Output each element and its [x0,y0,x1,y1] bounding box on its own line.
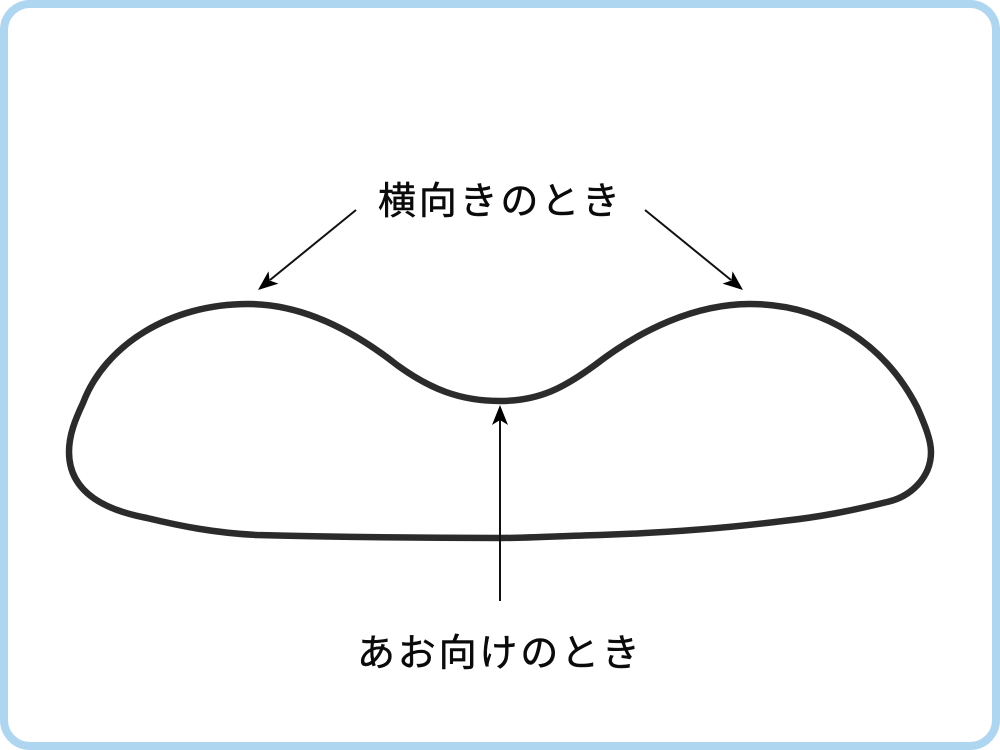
arrow: to right bump [645,210,743,290]
arrow: to left bump [258,210,356,290]
label: back sleeping: あお向けのとき [357,633,643,675]
label: side sleeping: 横向きのとき [378,181,623,223]
arrow: to center dip [492,405,508,601]
pillow outline [69,304,931,538]
